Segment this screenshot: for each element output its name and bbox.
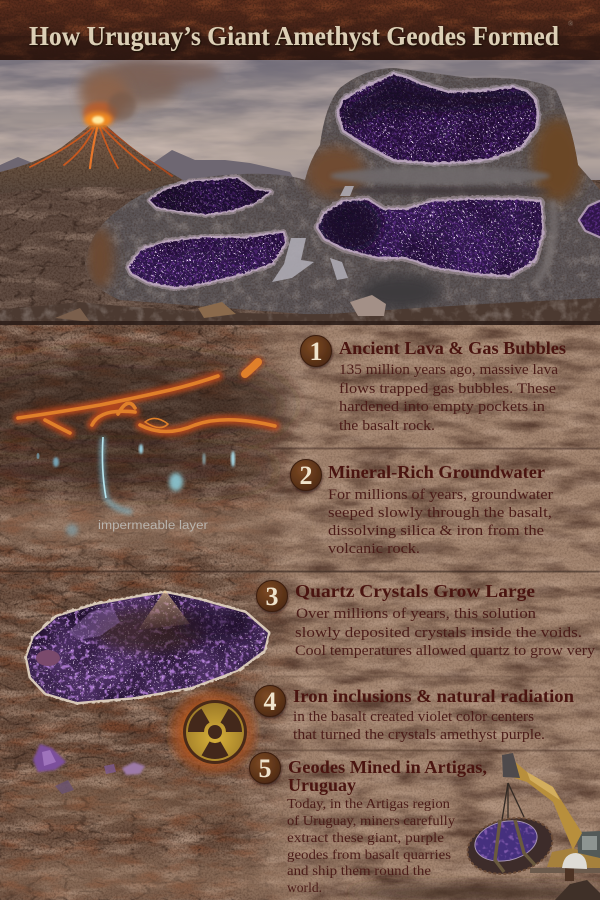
body 5: extract these giant, purple [287, 830, 444, 845]
illustration: excavator lifting a geode [462, 753, 600, 900]
body 1: the basalt rock. [339, 418, 435, 434]
body 2: dissolving silica & iron from the [328, 523, 544, 539]
sky [0, 60, 600, 190]
worker with hard hat [555, 853, 600, 900]
groundwater drips [36, 437, 235, 536]
excavator body [530, 831, 600, 873]
excavator arm [513, 760, 582, 850]
body 5: and ship them round the [287, 863, 431, 878]
panel background: stone texture for all steps [0, 325, 600, 900]
step 4 text [254, 686, 574, 743]
body 5: geodes from basalt quarries [287, 847, 451, 862]
heading 1: Ancient Lava & Gas Bubbles [339, 338, 566, 358]
body 1 [339, 362, 559, 434]
mineral light cone [138, 590, 190, 630]
bucket [502, 753, 520, 778]
body 2: For millions of years, groundwater [328, 487, 553, 503]
body 3: slowly deposited crystals inside the voids. [295, 625, 582, 641]
basalt boulder [80, 60, 600, 330]
body 3: Over millions of years, this solution [296, 606, 537, 622]
step 1 text [300, 336, 566, 434]
body 2: volcanic rock. [328, 541, 420, 557]
geode cavity: lower left [125, 230, 290, 290]
illustration: lava flow and gas bubbles [18, 362, 275, 536]
white calcite patches [272, 186, 354, 282]
geode cavity: upper left [145, 175, 275, 217]
badge 2: 2 [300, 461, 312, 490]
basalt boulder with geodes [80, 60, 600, 330]
badge 3 [256, 580, 288, 612]
geode cavity: centre [312, 195, 547, 280]
heading 5 [288, 757, 487, 795]
step 5 text [250, 752, 487, 895]
step 3 text [256, 580, 596, 659]
body 5: world. [287, 880, 322, 895]
lifted geode [466, 817, 554, 875]
badge 3: 3 [266, 582, 278, 611]
body 5: of Uruguay, miners carefully [287, 813, 455, 828]
body 2 [328, 487, 553, 557]
ash plume [80, 60, 220, 124]
step 2 text [290, 460, 553, 557]
heading 5: Uruguay [288, 775, 356, 795]
hero scene [0, 60, 600, 330]
body 2: seeped slowly through the basalt, [328, 505, 552, 521]
body 1: 135 million years ago, massive lava [339, 362, 559, 378]
badge 5 [250, 752, 280, 784]
body 4: that turned the crystals amethyst purple. [293, 727, 545, 743]
heading 5: Geodes Mined in Artigas, [288, 757, 487, 777]
badge 5: 5 [258, 754, 272, 783]
body 4 [293, 709, 545, 743]
lava streams [30, 127, 172, 176]
heading 2: Mineral-Rich Groundwater [328, 462, 545, 482]
distant mountains [0, 150, 292, 180]
badge 4: 4 [264, 687, 276, 716]
volcano [0, 125, 184, 194]
illustration: geode interior with crystals [25, 590, 270, 705]
section divider lines [0, 448, 600, 751]
body 4: in the basalt created violet color centers [293, 709, 534, 725]
geode cavity: top [330, 70, 545, 166]
foreground rubble [0, 295, 600, 328]
heading 3: Quartz Crystals Grow Large [295, 581, 535, 601]
body 5: Today, in the Artigas region [287, 796, 450, 811]
registered mark: ® [568, 20, 574, 28]
body 3: Cool temperatures allowed quartz to grow very [295, 643, 596, 659]
chains [502, 783, 524, 820]
body 5 [287, 796, 455, 895]
badge 2 [290, 460, 322, 490]
title band [0, 0, 600, 60]
lava streaks [18, 362, 275, 433]
title: How Uruguay’s Giant Amethyst Geodes Formed [29, 21, 559, 51]
body 3 [295, 606, 596, 659]
lava field ground [0, 180, 600, 314]
amethyst fragments in rubble [33, 744, 145, 794]
body 1: hardened into empty pockets in [339, 399, 546, 415]
body 1: flows trapped gas bubbles. These [339, 381, 556, 397]
heading 4: Iron inclusions & natural radiation [293, 686, 574, 706]
badge 1: 1 [310, 337, 322, 366]
badge 1 [300, 336, 332, 366]
badge 4 [254, 686, 286, 716]
crater glow [84, 112, 112, 128]
geode cavity: right edge [578, 200, 600, 238]
icon: radiation symbol [165, 686, 261, 778]
impermeable layer label: impermeable layer [98, 520, 208, 532]
